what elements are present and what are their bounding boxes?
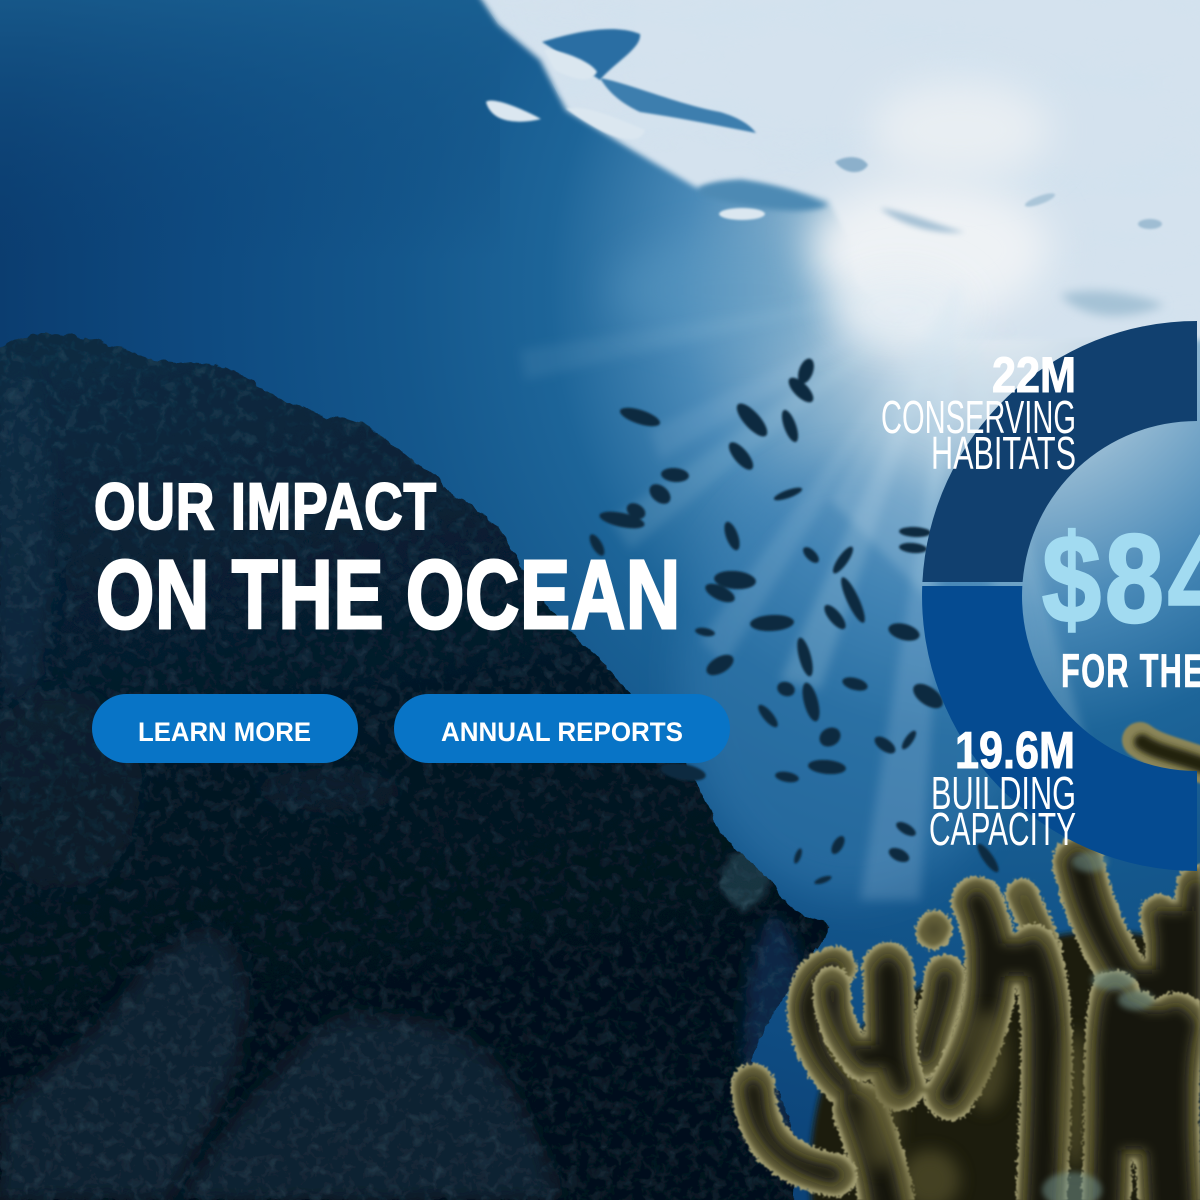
surface: bright reflections — [486, 50, 765, 220]
coral — [753, 740, 1200, 1200]
segment: conserving habitats — [922, 321, 1197, 582]
stat: 19.6M building capacity — [929, 722, 1076, 855]
stat: 22M conserving habitats — [881, 347, 1076, 479]
button: learn more: LEARN MORE — [138, 717, 311, 747]
stat: 22M conserving habitats: HABITATS — [931, 427, 1076, 479]
button: learn more — [92, 694, 358, 763]
title line 1: OUR IMPACT — [94, 469, 437, 543]
stat: 22M conserving habitats: CONSERVING — [881, 391, 1076, 443]
segment: building capacity — [922, 586, 1197, 871]
light rays — [520, 280, 1090, 900]
coral: finger inside ring hole — [1140, 740, 1200, 766]
coral: lit olive patches on the mass — [860, 1010, 1089, 1200]
stat: 22M conserving habitats: 22M — [992, 347, 1076, 403]
title line 2: ON THE OCEAN — [96, 540, 681, 649]
coral: front branches — [753, 902, 1176, 1200]
rock: lower left lump — [0, 932, 245, 1200]
coral: dark base mass — [810, 931, 1200, 1200]
button: annual reports — [394, 694, 730, 763]
donut chart — [881, 321, 1200, 871]
stat: 19.6M building capacity: CAPACITY — [929, 803, 1076, 855]
surface: dark water patches — [542, 29, 1165, 316]
coral: teal branch tips — [1042, 852, 1154, 1200]
coral: back branches — [809, 862, 1197, 1200]
title — [94, 469, 681, 649]
stat: 19.6M building capacity: 19.6M — [955, 722, 1075, 780]
rock: lower centre lump — [180, 1017, 560, 1200]
school of fish — [587, 356, 1002, 886]
stat: 19.6M building capacity: BUILDING — [931, 767, 1076, 819]
water surface: bright clouds of light — [455, 0, 1200, 350]
rock formation — [0, 330, 840, 1200]
button: annual reports: ANNUAL REPORTS — [441, 717, 683, 747]
